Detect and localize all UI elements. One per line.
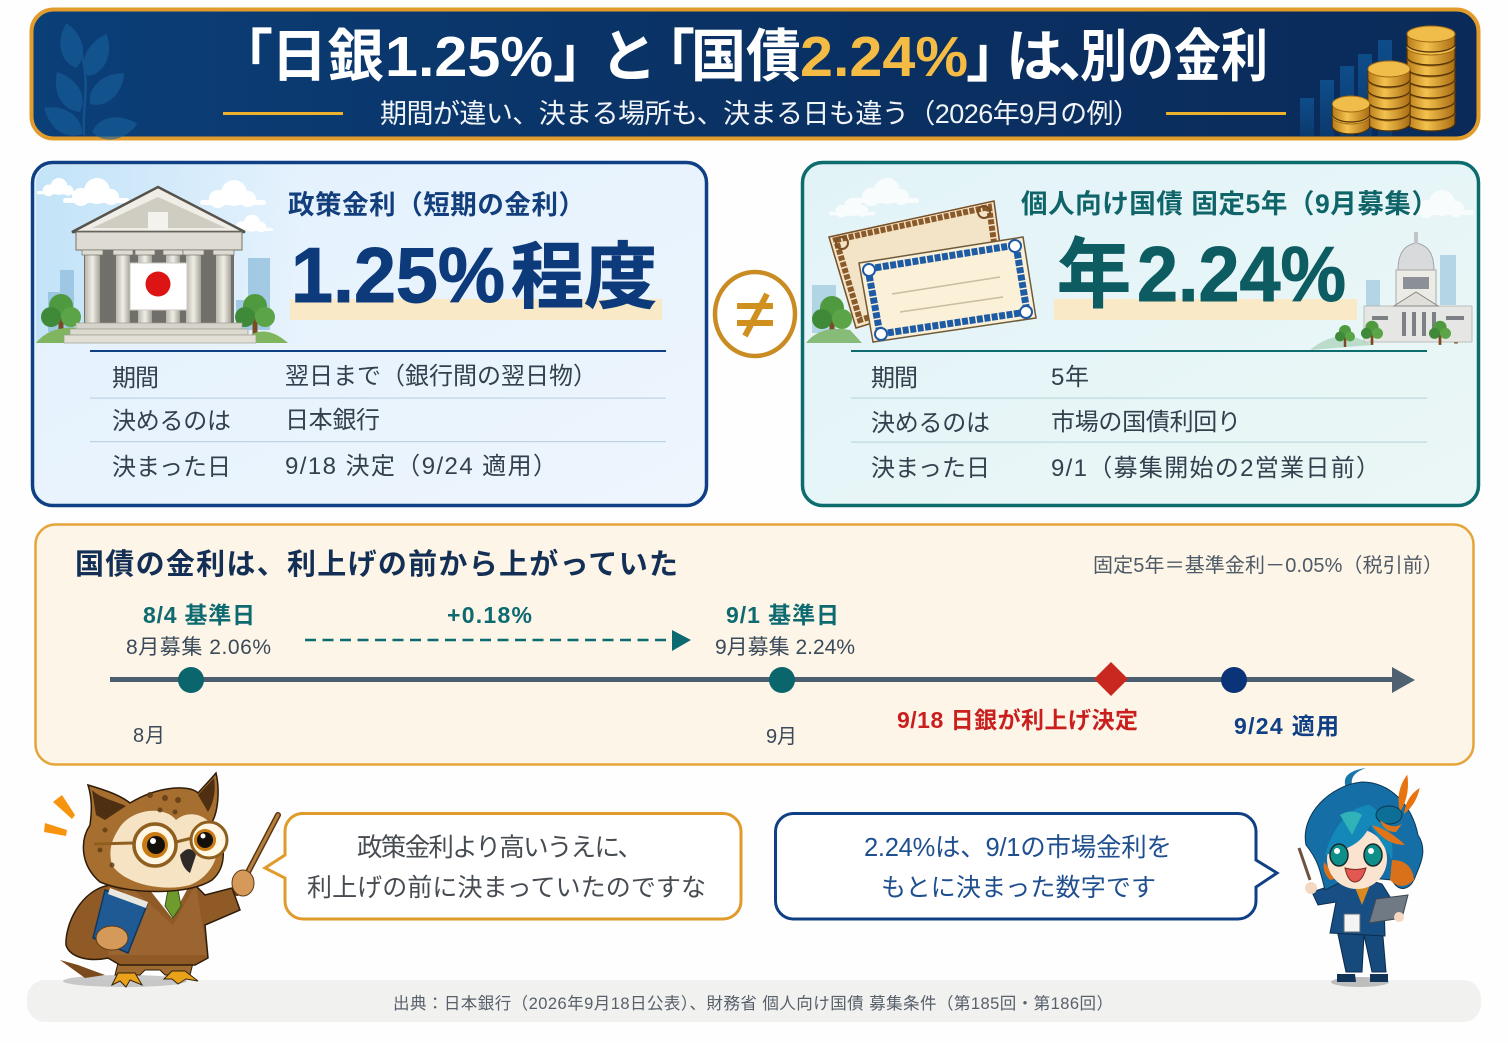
title: 2.24% xyxy=(800,25,968,89)
title: 、 xyxy=(1058,25,1115,89)
title: 1.25% xyxy=(385,25,553,89)
marker: application xyxy=(1221,667,1339,739)
rate value: 2.24% xyxy=(1137,230,1346,318)
table: details: 9/18 決定（9/24 適用） xyxy=(285,453,557,480)
scene: bank of japan xyxy=(36,165,300,343)
heading: 政策金利（短期の金利） xyxy=(288,190,585,220)
table: details: 期間 xyxy=(112,365,159,392)
panel: policy rate xyxy=(32,162,706,506)
marker: september base date: 9月 xyxy=(766,726,797,748)
panel: timeline xyxy=(36,524,1474,764)
title: 「 xyxy=(638,25,695,89)
rate value xyxy=(290,231,662,320)
table: details: 9/1（募集開始の2営業日前） xyxy=(1051,455,1380,482)
marker: september base date xyxy=(715,602,855,748)
character: guide girl xyxy=(1299,768,1423,987)
scene: diet building xyxy=(1310,232,1472,350)
character: owl teacher xyxy=(44,773,278,987)
table: details xyxy=(90,350,666,481)
table: details: 決まった日 xyxy=(871,455,990,482)
rate value: 程度 xyxy=(511,238,657,318)
axis xyxy=(110,667,1415,693)
title: 」 xyxy=(966,25,1023,89)
title: 「 xyxy=(216,25,273,89)
icon: leaf plant xyxy=(38,21,139,143)
marker: september base date: 9月募集 2.24% xyxy=(715,636,855,659)
marker: august base date: 8月募集 2.06% xyxy=(126,636,271,659)
scene: bond certificates xyxy=(806,178,1474,343)
panel: individual bond xyxy=(802,162,1478,506)
speech bubble: guide xyxy=(776,814,1277,919)
speech bubble: owl xyxy=(265,814,741,919)
table: details xyxy=(851,350,1427,482)
footer source xyxy=(27,980,1481,1022)
footer source: 出典：日本銀行（2026年9月18日公表）、財務省 個人向け国債 募集条件（第185回・第186回） xyxy=(393,994,1113,1013)
subtitle: 期間が違い、決まる場所も、決まる日も違う（2026年9月の例） xyxy=(380,99,1140,129)
speech bubble: owl: 政策金利より高いうえに、 xyxy=(357,834,643,862)
marker: boj decision xyxy=(897,662,1138,733)
timeline heading: 国債の金利は、利上げの前から上がっていた xyxy=(75,547,678,581)
rate change arrow: +0.18% xyxy=(447,602,532,628)
marker: application: 9/24 適用 xyxy=(1234,713,1339,739)
title: 国債 xyxy=(691,25,801,89)
title: 」 xyxy=(553,25,610,89)
marker: august base date xyxy=(126,602,271,747)
formula note: 固定5年＝基準金利－0.05%（税引前） xyxy=(1093,554,1443,577)
rate value: 1.25% xyxy=(291,231,505,319)
icon: not equal xyxy=(715,272,795,356)
title xyxy=(216,25,1268,89)
icon: bird and feather xyxy=(1396,774,1422,816)
table: details: 決めるのは xyxy=(112,408,231,435)
icon: coins and bars xyxy=(1300,26,1455,136)
icon: emphasis marks xyxy=(44,795,75,836)
table: details: 期間 xyxy=(871,365,918,392)
marker: september base date: 9/1 基準日 xyxy=(726,602,839,628)
table: details: 翌日まで（銀行間の翌日物） xyxy=(285,363,597,390)
marker: august base date: 8/4 基準日 xyxy=(143,602,255,628)
table: details: 決めるのは xyxy=(871,410,990,437)
marker: boj decision: 9/18 日銀が利上げ決定 xyxy=(897,707,1138,733)
speech bubble: guide: もとに決まった数字です xyxy=(881,874,1156,902)
title: と xyxy=(600,25,657,89)
table: details: 日本銀行 xyxy=(285,407,380,434)
table: details: 決まった日 xyxy=(112,454,231,481)
table: details: 5年 xyxy=(1051,364,1089,391)
speech bubble: owl: 利上げの前に決まっていたのですな xyxy=(307,874,706,902)
rate change arrow xyxy=(305,602,691,651)
speech bubble: guide: 2.24%は、9/1の市場金利を xyxy=(864,834,1172,862)
table: details: 市場の国債利回り xyxy=(1051,409,1241,436)
title: 別の金利 xyxy=(1080,25,1268,89)
icon: book xyxy=(93,890,147,953)
heading: 個人向け国債 固定5年（9月募集） xyxy=(1021,189,1438,219)
marker: august base date: 8月 xyxy=(133,725,165,747)
title: 日銀 xyxy=(271,25,384,89)
header banner xyxy=(32,10,1478,143)
title: は xyxy=(1006,25,1063,89)
rate value: 年 xyxy=(1057,233,1131,318)
